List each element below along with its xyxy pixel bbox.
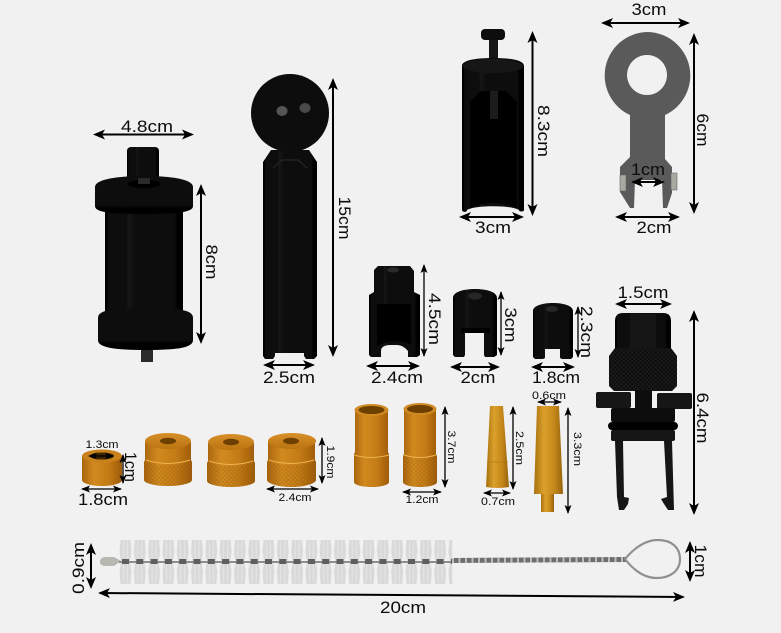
label: 1.5cm: 1.5cm: [618, 283, 668, 302]
arrow: 8.3cm: [532, 33, 534, 214]
arrow: 0.6cm: [538, 401, 561, 403]
label: 1.2cm: 1.2cm: [406, 494, 438, 506]
label: 0.6cm: 0.6cm: [532, 390, 566, 402]
arrow: 1.8cm: [82, 488, 121, 490]
brush body: [100, 540, 680, 584]
label: 20cm: 20cm: [380, 598, 426, 617]
tool: 3cm black socket with dimensions: [452, 289, 520, 387]
ball handle body: [251, 74, 329, 359]
arrow: 1.5cm: [617, 303, 670, 305]
label: 2.3cm: 2.3cm: [577, 306, 596, 358]
arrow: 2.5cm: [512, 407, 514, 489]
part: gold taper with dimensions: [481, 406, 525, 508]
ring body: [82, 450, 122, 486]
part: gold sleeve 2 with dimensions: [403, 403, 457, 506]
plate body: [605, 32, 690, 208]
tool: metal plate with dimensions: [603, 0, 712, 237]
label: 1cm: 1cm: [121, 452, 140, 482]
tool: ball handle with dimensions: [251, 74, 354, 387]
tool: 4.5cm black socket with dimensions: [368, 265, 444, 387]
socket body: [453, 289, 497, 357]
label: 1.8cm: 1.8cm: [78, 490, 128, 509]
label: 3cm: 3cm: [475, 218, 511, 237]
arrow: 0.7cm: [484, 492, 510, 494]
arrow: 2.4cm: [368, 365, 418, 367]
label: 3.7cm: 3.7cm: [445, 430, 457, 464]
arrow: 2.5cm: [265, 364, 313, 366]
label: 3.3cm: 3.3cm: [571, 432, 583, 466]
label: 1.8cm: 1.8cm: [532, 368, 580, 387]
part: small gold ring with dimensions: [78, 439, 140, 509]
label: 4.8cm: 4.8cm: [121, 117, 173, 136]
label: 4.5cm: 4.5cm: [425, 293, 444, 345]
label: 0.7cm: 0.7cm: [481, 496, 515, 508]
tool: knurled clamp with dimensions: [596, 283, 712, 513]
arrow: 2cm: [617, 216, 678, 218]
arrow: 6.4cm: [693, 312, 695, 513]
arrow: 1cm: [689, 543, 691, 580]
taper body: [486, 406, 509, 488]
label: 2.4cm: 2.4cm: [371, 368, 423, 387]
arrow: 20cm: [100, 593, 683, 597]
label: 6cm: 6cm: [693, 114, 712, 146]
label: 8.3cm: 8.3cm: [534, 105, 553, 157]
label: 2.5cm: 2.5cm: [513, 431, 525, 465]
label: 15cm: 15cm: [335, 196, 354, 240]
label: 1.9cm: 1.9cm: [324, 446, 336, 478]
arrow: 1cm: [633, 181, 663, 183]
label: 3cm: 3cm: [501, 308, 520, 342]
arrow: 2.3cm: [577, 307, 579, 357]
arrow: 3.7cm: [444, 407, 446, 487]
label: 2.5cm: 2.5cm: [263, 368, 315, 387]
knob body: [267, 433, 316, 487]
sleeve body: [403, 403, 437, 487]
part: gold sleeve 1: [354, 404, 389, 487]
part: gold knob 1: [144, 433, 192, 486]
tool: cleaning brush with dimensions: [69, 540, 710, 617]
arrow: 2.4cm: [267, 488, 318, 490]
label: 1.3cm: 1.3cm: [86, 439, 118, 451]
part: gold knob 3 with dimensions: [267, 433, 336, 504]
socket body: [369, 266, 420, 357]
arrow: 3.3cm: [567, 408, 569, 513]
arrow: 2cm: [452, 366, 498, 368]
arrow: 8cm: [200, 186, 202, 342]
tool: black cylinder with dimensions: [95, 117, 221, 362]
part: gold knob 2: [207, 434, 255, 487]
puller body: [462, 29, 524, 212]
arrow: 3cm: [461, 216, 522, 218]
tool: 2.3cm black socket with dimensions: [532, 303, 596, 387]
arrow: 3cm: [500, 292, 502, 355]
arrow: 4.5cm: [423, 265, 425, 356]
arrow: 3cm top: [603, 22, 688, 24]
tool: slotted puller with dimensions: [461, 29, 553, 237]
label: 1cm: 1cm: [691, 544, 710, 578]
part: gold pin with dimensions: [532, 390, 583, 513]
arrow: 4.8cm: [95, 134, 192, 136]
cylinder body: [95, 147, 193, 362]
pin body: [534, 406, 563, 512]
label: 2cm: 2cm: [460, 368, 496, 387]
arrow: 6cm: [693, 35, 695, 212]
arrow: 1.9cm: [321, 438, 323, 483]
label: 2.4cm: 2.4cm: [278, 492, 312, 504]
arrow: 1.3cm: [89, 455, 113, 457]
label: 1cm: 1cm: [631, 160, 665, 179]
socket body: [533, 303, 573, 359]
label: 3cm top: 3cm: [632, 0, 666, 19]
label: 6.4cm: 6.4cm: [693, 392, 712, 444]
label: 8cm: 8cm: [202, 244, 221, 280]
arrow: 1cm: [122, 455, 124, 483]
arrow: 1.8cm: [533, 366, 573, 368]
clamp body: [596, 313, 692, 510]
arrow: 1.2cm: [403, 491, 441, 493]
label: 2cm: 2cm: [636, 218, 672, 237]
arrow: 0.9cm: [90, 545, 92, 587]
arrow: 15cm: [332, 80, 334, 355]
label: 0.9cm: 0.9cm: [69, 542, 88, 594]
